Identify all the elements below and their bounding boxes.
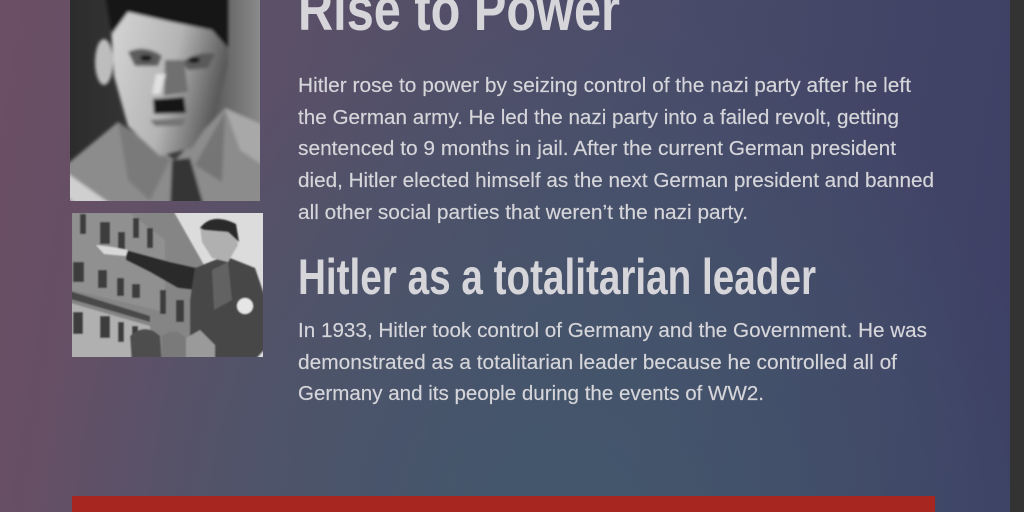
text block: rise to power paragraph: Hitler rose to power by seizing control of the nazi party after he left — [298, 75, 911, 97]
text block: rise to power paragraph: the German army. He led the nazi party into a failed revolt, getting — [298, 107, 899, 129]
text block: rise to power paragraph: died, Hitler elected himself as the next German president and banned — [298, 170, 934, 192]
red banner — [72, 496, 935, 512]
text block: totalitarian leader paragraph: Germany and its people during the events of WW2. — [298, 383, 764, 405]
text block: totalitarian leader paragraph — [298, 320, 927, 405]
heading: Hitler as a totalitarian leader: Hitler as a totalitarian leader — [298, 249, 816, 305]
text block: rise to power paragraph — [298, 75, 934, 224]
text block: totalitarian leader paragraph: In 1933, Hitler took control of Germany and the Government. He was — [298, 320, 927, 342]
text block: rise to power paragraph: all other social parties that weren’t the nazi party. — [298, 202, 748, 224]
text block: totalitarian leader paragraph: demonstrated as a totalitarian leader because he controlled all of — [298, 352, 897, 374]
photo: uniformed figure with raised arm in front of a building (stylised) — [72, 213, 263, 357]
text block: rise to power paragraph: sentenced to 9 months in jail. After the current German president — [298, 138, 896, 160]
photo: portrait in black and white (stylised) — [70, 0, 260, 201]
